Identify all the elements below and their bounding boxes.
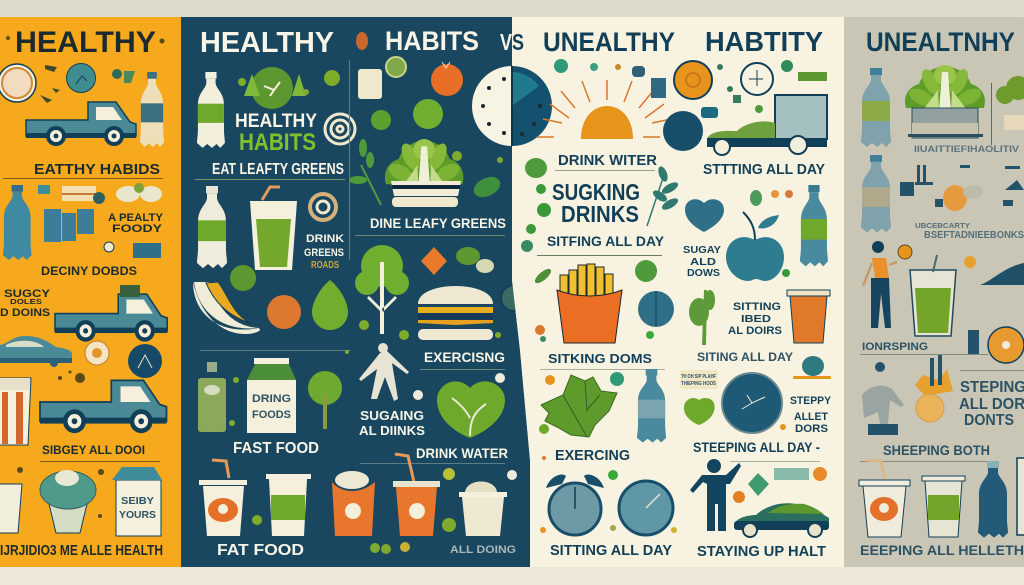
icon: green cup	[922, 476, 965, 537]
text: steeping all day: STEEPING ALL DAY -	[693, 439, 820, 455]
icon: blue bottle	[3, 185, 32, 260]
text: bottom line: IJRJIDIO3 ME ALLE HEALTH	[0, 542, 163, 559]
text: drink greens roads: DRINK	[306, 233, 344, 245]
icon: blue bottle	[861, 155, 891, 232]
icon: teal dial	[66, 64, 96, 92]
icon: orange cup	[787, 290, 830, 343]
text: sugking drinks: DRINKS	[561, 201, 639, 227]
icon: green leaves	[456, 247, 494, 273]
icon: orange blob	[943, 185, 983, 211]
icon: blue boxes	[44, 209, 94, 242]
icon: orange coin	[916, 394, 944, 422]
icon: orange apple	[431, 62, 463, 96]
icon: orange and teal bars	[915, 355, 953, 396]
text: steppy allet dors	[790, 395, 832, 435]
text: sitting ibed al doirs: AL DOIRS	[728, 325, 782, 337]
text: eat leafy greens: EAT LEAFTY GREENS	[212, 161, 344, 178]
icon: plate	[0, 64, 36, 102]
text: healthy habits badge: HEALTHY	[235, 111, 317, 132]
icon: car	[0, 336, 72, 367]
icon: small tag: THIEPING HOOS	[681, 381, 717, 387]
icon: pale leaves	[116, 183, 162, 202]
icon: lettuce in tray	[905, 65, 985, 138]
icon: white bottle with label	[197, 72, 225, 148]
text: fast food: FAST FOOD	[233, 440, 319, 457]
icon: truck	[707, 95, 827, 155]
text: eatthy habids: EATTHY HABIDS	[34, 161, 160, 178]
icon: teal bar and orange dot	[733, 467, 827, 503]
icon: small blue box	[104, 242, 161, 258]
icon: hat	[793, 356, 831, 379]
heading: vs: V	[500, 29, 513, 55]
icon: cup with green band	[266, 474, 311, 536]
icon: green branch	[349, 139, 381, 205]
icon: wall clock	[472, 66, 552, 146]
icon: green badge	[748, 473, 769, 496]
icon: cup	[0, 484, 22, 533]
icon: cream circle	[85, 341, 109, 365]
icon: teal heart	[685, 199, 724, 232]
text: sitting ibed al doirs: IBED	[741, 314, 771, 325]
text: blurred label: UBCEBCARTY	[915, 223, 970, 230]
icon: teal disc	[501, 285, 527, 311]
text: a pealty foody	[108, 212, 164, 235]
icon: pickup truck	[55, 294, 167, 342]
icon: orange box	[332, 471, 375, 536]
icon: green circle	[230, 265, 256, 291]
text: sugay ald dows: DOWS	[687, 268, 720, 279]
icon: lidded cup with text	[112, 467, 162, 536]
icon: grey figure	[862, 362, 904, 435]
text: steppy allet dors: STEPPY	[790, 395, 832, 407]
icon: exercising person	[359, 343, 409, 401]
text: fat food: FAT FOOD	[217, 542, 304, 559]
icon: navy wall clock	[722, 373, 782, 433]
icon: lidded cup with text: YOURS	[119, 510, 156, 521]
icon: pickup truck	[26, 102, 136, 146]
panel: healthy navy column	[181, 17, 530, 567]
icon: dark shoe	[980, 263, 1024, 285]
orange speckles	[6, 36, 164, 518]
text: exercing: EXERCING	[555, 447, 630, 464]
text: sugaing al diinks	[359, 408, 425, 438]
icon: green apple	[413, 99, 443, 129]
icon: white cup with straw	[859, 460, 910, 537]
text: sitting ibed al doirs: SITTING	[733, 301, 781, 313]
icon: orange plate	[968, 327, 1024, 363]
icon: plate	[674, 61, 712, 99]
heading: habits: HABITS	[385, 26, 479, 56]
icon: pickup truck	[40, 380, 166, 433]
icon: green leaf	[312, 280, 348, 330]
icon: leaf	[471, 173, 503, 201]
icon: teal dot	[610, 372, 624, 386]
icon: small green shapes	[40, 65, 135, 103]
icon: fries	[557, 264, 622, 343]
icon: sun	[537, 80, 671, 139]
icon: white planter	[459, 482, 507, 536]
text: drink water: DRINK WATER	[416, 445, 508, 461]
text: a pealty foody: FOODY	[112, 223, 163, 235]
icon: burger	[418, 286, 493, 340]
icon: alarm clock	[546, 474, 604, 535]
cream speckles	[535, 64, 786, 533]
heading: unealthy: UNEALTHY	[543, 27, 675, 57]
text: sttting all day: STTTING ALL DAY	[703, 161, 825, 178]
text: sugking drinks	[552, 179, 640, 227]
icon: green disc	[386, 57, 406, 77]
icon: concentric rings	[325, 114, 355, 144]
icon: drink carton	[247, 358, 296, 433]
text: sugcy doins	[0, 288, 51, 319]
icon: car	[734, 503, 829, 537]
text: blurred label	[915, 223, 1024, 241]
icon: tree	[355, 245, 409, 334]
icon: book	[62, 186, 105, 204]
icon: clock	[619, 481, 673, 535]
icon: green splash	[521, 184, 551, 252]
text: siting all day: SITING ALL DAY	[697, 350, 793, 364]
icon: orange cup with straw	[393, 454, 440, 536]
text: drginy dobds: DECINY DOBDS	[41, 264, 137, 278]
icon: lidded cup with text: SEIBY	[121, 496, 154, 507]
icon: muffin	[40, 470, 96, 533]
text: exercising: EXERCISNG	[424, 349, 505, 365]
text: sugay ald dows: ALD	[690, 257, 716, 268]
text: steppy allet dors: DORS	[795, 423, 828, 435]
icon: navy disc	[663, 111, 703, 151]
icon: popcorn	[0, 378, 31, 445]
text: sugay ald dows	[683, 245, 721, 279]
text: sugking drinks: SUGKING	[552, 179, 640, 205]
icon: clock	[741, 63, 773, 95]
text: healthy habits badge	[235, 111, 317, 156]
icon: green plant	[244, 67, 306, 109]
text: steping all dor donts	[959, 379, 1024, 429]
icon: green apple	[684, 398, 715, 425]
text: steping all dor donts: DONTS	[964, 412, 1014, 429]
icon: taco	[193, 282, 260, 334]
icon: lettuce bowl	[385, 139, 463, 207]
heading: healthy: HEALTHY	[15, 26, 156, 59]
text: sugcy doins: D DOINS	[0, 307, 50, 319]
text: all doing: ALL DOING	[450, 544, 516, 556]
icon: ring	[310, 194, 336, 220]
text: staying up halt: STAYING UP HALT	[697, 543, 826, 560]
icon: blue bottle	[861, 68, 891, 147]
icon: green heart	[437, 381, 505, 438]
icon: drink carton: DRING	[252, 393, 291, 405]
icon: cream bottle	[140, 72, 164, 147]
text: sugcey all dooi: SIBGEY ALL DOOI	[42, 443, 145, 457]
navy speckles	[229, 78, 517, 554]
text: drink greens roads	[304, 233, 344, 271]
icon: small shield	[38, 185, 50, 194]
text: a pealty foody: A PEALTY	[108, 212, 164, 224]
icon: orange	[267, 295, 301, 329]
icon: teal branch	[647, 165, 680, 226]
icon: white cup with straw	[199, 460, 247, 536]
panel: unhealthy grey column	[844, 17, 1024, 567]
text: sitking doms: SITKING DOMS	[548, 351, 652, 366]
icon: green glass	[910, 255, 956, 336]
icon: teal disc	[638, 291, 674, 327]
heading: vs	[500, 29, 524, 55]
text: sitfing all day: SITFING ALL DAY	[547, 233, 665, 249]
icon: woman with ball	[863, 241, 912, 328]
text: healthy habits badge: HABITS	[239, 129, 316, 156]
icon: tablet	[1017, 458, 1024, 535]
icon: navy bottle	[978, 461, 1008, 538]
icon: drink carton: FOODS	[252, 409, 291, 421]
icon: green dot and leaf	[781, 60, 827, 81]
icon: small tree	[308, 371, 342, 429]
icon: person	[690, 459, 741, 531]
text: sugcy doins: DOLES	[10, 299, 42, 306]
panel: healthy orange column	[0, 17, 181, 567]
icon: navy circle	[128, 344, 162, 378]
icon: small tag: TH OH SIP PLAHF	[681, 374, 716, 380]
text: steppy allet dors: ALLET	[794, 411, 828, 423]
icon: note card	[358, 69, 382, 99]
icon: small green circle	[371, 110, 391, 130]
heading: vs: S	[512, 29, 524, 55]
icon: green plant	[689, 290, 715, 345]
text: drink witer: DRINK WITER	[558, 152, 657, 169]
text: sitting ibed al doirs	[728, 301, 782, 337]
icon: green chunks	[996, 76, 1024, 130]
text: drink greens roads: GREENS	[304, 247, 344, 259]
icon: small tag	[680, 370, 718, 389]
icon: orange diamond	[421, 247, 447, 275]
icon: orange coin	[964, 256, 976, 268]
text: sugay ald dows: SUGAY	[683, 245, 721, 256]
text: sugaing al diinks: SUGAING	[360, 408, 424, 423]
icon: scattered marks	[900, 165, 1024, 207]
text: sugcy doins: SUGCY	[4, 288, 51, 300]
icon: green bottle	[198, 362, 226, 432]
icon: teal bottle	[637, 369, 666, 442]
icon: green blob	[525, 158, 547, 178]
text: sheeping both: SHEEPING BOTH	[883, 442, 990, 458]
heading: habtity: HABTITY	[705, 26, 823, 57]
icon: crumpled greens	[541, 375, 617, 437]
text: eeeping all health: EEEPING ALL HELLETH	[860, 542, 1024, 558]
icon: teal apple	[726, 212, 784, 281]
icon: green and orange marks	[750, 190, 793, 277]
icon: orange leaf	[356, 32, 368, 50]
heading: healthy: HEALTHY	[200, 27, 334, 59]
text: sitting all day: SITTING ALL DAY	[550, 542, 672, 559]
icon: white bottle with label	[197, 186, 227, 268]
text: drink greens roads: ROADS	[311, 260, 339, 271]
text: dine leafy greens: DINE LEAFY GREENS	[370, 215, 506, 231]
text: ionrsping: IONRSPING	[862, 341, 928, 353]
icon: teal bottle	[800, 185, 828, 266]
icon: green dot	[324, 70, 340, 86]
icon: teal dots	[554, 59, 666, 98]
icon: green juice glass	[250, 187, 297, 270]
panel: unhealthy cream column	[472, 17, 844, 567]
text: sugaing al diinks: AL DIINKS	[359, 423, 425, 438]
icon: small leaf	[533, 267, 553, 285]
icon: green circle	[635, 260, 657, 282]
text: blurred row: IIUAITTIEFIHAOLITIV	[914, 144, 1019, 154]
